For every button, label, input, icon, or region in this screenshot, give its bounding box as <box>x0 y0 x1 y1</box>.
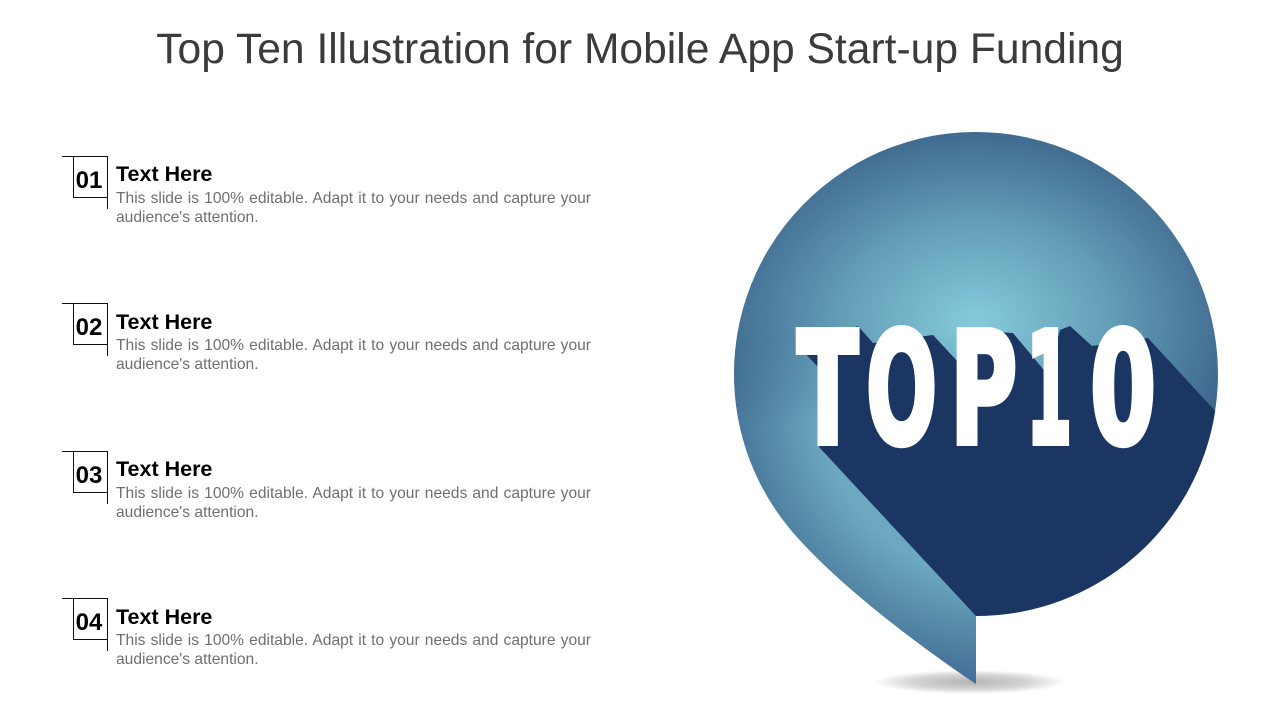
list item 02: This slide is 100% editable. Adapt it to your needs and capture your <box>116 337 591 354</box>
list item 03: audience's attention. <box>116 504 259 521</box>
list item 03 <box>62 451 591 521</box>
TOP10 lettering: P <box>950 301 1017 481</box>
list item 02 <box>62 303 591 373</box>
list item 01: This slide is 100% editable. Adapt it to your needs and capture your <box>116 190 591 207</box>
list item 04: Text Here <box>116 605 212 629</box>
list item 03: Text Here <box>116 457 212 481</box>
list item 02: Text Here <box>116 310 212 334</box>
list item 01 <box>62 156 591 226</box>
list item 01: Text Here <box>116 162 212 186</box>
title: Top Ten Illustration for Mobile App Start-up Funding <box>156 25 1124 73</box>
list item 02: 02 <box>76 314 102 341</box>
list item 02: audience's attention. <box>116 356 259 373</box>
list item 04: audience's attention. <box>116 651 259 668</box>
TOP10 lettering: O <box>866 300 937 480</box>
graphic: top 10 speech pin <box>734 132 1218 693</box>
TOP10 lettering: 1 <box>1026 300 1072 481</box>
TOP10 lettering: T <box>797 299 858 480</box>
list item 01: 01 <box>76 167 102 194</box>
pin ground shadow <box>874 670 1066 694</box>
TOP10 lettering: 0 <box>1090 301 1156 480</box>
long shadow of the lettering <box>798 326 1215 616</box>
list item 04 <box>62 598 591 668</box>
list item 04: This slide is 100% editable. Adapt it to your needs and capture your <box>116 632 591 649</box>
list item 01: audience's attention. <box>116 209 259 226</box>
TOP10 lettering <box>797 299 1156 481</box>
list item 04: 04 <box>76 609 102 636</box>
list item 03: 03 <box>76 462 102 489</box>
list item 03: This slide is 100% editable. Adapt it to your needs and capture your <box>116 485 591 502</box>
pin body <box>734 132 1218 684</box>
